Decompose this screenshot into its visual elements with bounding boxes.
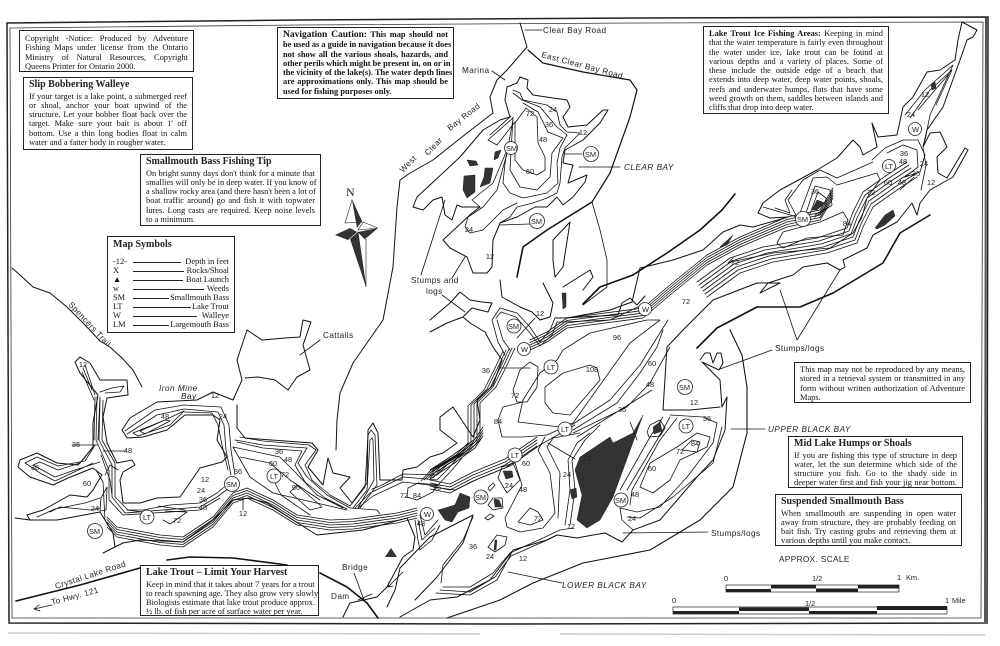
fish location markers: SM bbox=[797, 215, 808, 224]
depth labels: 24 bbox=[920, 159, 928, 168]
panel: map symbols legend: Boat Launch bbox=[186, 275, 229, 284]
islands: Clear Bay bbox=[463, 150, 501, 198]
panel: mid lake humps or shoals: structure you fish. Go to the shady side in bbox=[794, 469, 957, 478]
depth labels: 36 bbox=[469, 542, 477, 551]
panel: lake trout limit your harvest: Biologists estimate that lake trout produce approx. bbox=[146, 598, 315, 607]
panel: slip bobbering walleye: structure. Let your bobber float back over the bbox=[29, 110, 187, 119]
panel: map symbols legend: Smallmouth Bass bbox=[170, 293, 229, 302]
panel: lake trout ice fishing areas: these include the outside edge of a beach that bbox=[709, 66, 883, 75]
road and place labels: West bbox=[398, 153, 419, 174]
panel: smallmouth bass fishing tip: to a minimum. bbox=[146, 215, 195, 224]
copyright notice bbox=[19, 30, 194, 72]
fish location markers: LT bbox=[682, 422, 691, 431]
panel: map symbols legend bbox=[107, 236, 235, 333]
depth labels: 84 bbox=[494, 417, 502, 426]
depth labels: 36 bbox=[912, 169, 920, 178]
depth labels: 24 bbox=[628, 514, 636, 523]
contours: west basins bbox=[25, 365, 462, 550]
panel: mid lake humps or shoals bbox=[788, 436, 963, 488]
contours: main lake bundles bbox=[421, 65, 953, 595]
panel: lake trout ice fishing areas: Lake Trout Ice Fishing Areas: Keeping in mind bbox=[709, 29, 883, 38]
road and place labels: East Clear Bay Road bbox=[540, 50, 624, 81]
fish location markers: SM bbox=[226, 480, 237, 489]
fish location markers: LT bbox=[561, 425, 570, 434]
panel: smallmouth bass fishing tip: smallies will only be in deep water. If you know of bbox=[146, 178, 316, 187]
fish location markers: SM bbox=[89, 527, 100, 536]
depth labels: 72 bbox=[511, 391, 519, 400]
depth labels: 48 bbox=[199, 503, 207, 512]
panel: suspended smallmouth bass: When smallmouth are suspending in open water bbox=[781, 508, 956, 518]
panel: reproduction notice: stored in a retrieval system or transmitted in any bbox=[800, 374, 965, 383]
panel: lake trout ice fishing areas: various depths and a variety of places. Some of bbox=[709, 57, 883, 66]
depth labels: 36 bbox=[199, 495, 207, 504]
depth labels: 72 bbox=[731, 258, 739, 267]
depth labels: 12 bbox=[583, 454, 591, 463]
fish location markers: SM bbox=[679, 383, 690, 392]
depth labels: 12 bbox=[579, 128, 587, 137]
depth labels: 24 bbox=[907, 110, 915, 119]
road and place labels: logs bbox=[426, 287, 443, 296]
panel: smallmouth bass fishing tip: boat traffic around) go and fish it with topwater bbox=[146, 196, 315, 205]
depth labels: 48 bbox=[284, 455, 292, 464]
depth labels: 60 bbox=[648, 464, 656, 473]
panel: map symbols legend: Depth in feet bbox=[185, 257, 229, 266]
depth labels: 24 bbox=[505, 481, 513, 490]
scale bars: 1/2 bbox=[805, 599, 815, 608]
depth labels: 84 bbox=[691, 439, 699, 448]
depth labels: 36 bbox=[618, 405, 626, 414]
fish location markers: SM bbox=[475, 493, 486, 502]
road and place labels: Stumps and bbox=[411, 276, 459, 285]
panel: mid lake humps or shoals: water, let the sun determine which side of the bbox=[794, 460, 957, 469]
panel: navigation caution: the vicinity of the lake(s). The water depth lines bbox=[283, 68, 452, 77]
road and place labels: Dam bbox=[331, 592, 350, 601]
panel: map symbols legend: LM bbox=[113, 320, 126, 329]
road and place labels: Clear bbox=[423, 136, 444, 157]
panel: map symbols legend: Rocks/Shoal bbox=[187, 266, 229, 275]
panel: mid lake humps or shoals: deeper water first and fish your jig near bottom. bbox=[794, 478, 957, 487]
panel: navigation caution: be used as a guide in navigation because it does bbox=[283, 40, 451, 49]
depth labels: 12 bbox=[211, 391, 219, 400]
road and place labels: To Hwy. 121 bbox=[50, 586, 100, 607]
depth labels: 60 bbox=[648, 359, 656, 368]
road and place labels: CLEAR BAY bbox=[624, 163, 674, 172]
depth labels: 72 bbox=[534, 514, 542, 523]
panel: map symbols legend: Walleye bbox=[202, 311, 229, 320]
depth labels: 72 bbox=[173, 516, 181, 525]
road and place labels: Marina bbox=[462, 66, 489, 75]
depth labels: 60 bbox=[269, 459, 277, 468]
panel: map symbols legend: Largemouth Bass bbox=[170, 320, 229, 329]
depth labels: 72 bbox=[682, 297, 690, 306]
road and place labels: Bay Road bbox=[446, 101, 482, 133]
fish location markers: SM bbox=[585, 150, 596, 159]
depth labels: 36 bbox=[703, 414, 711, 423]
depth labels: 36 bbox=[900, 149, 908, 158]
panel: slip bobbering walleye bbox=[23, 77, 193, 150]
copyright notice: Queens Printer for Ontario 2000. bbox=[25, 62, 135, 71]
panel: reproduction notice bbox=[794, 362, 971, 403]
depth labels: 12 bbox=[690, 398, 698, 407]
panel: lake trout ice fishing areas: that the water temperature is fairly even throughout bbox=[709, 38, 883, 47]
scale bars bbox=[672, 573, 966, 614]
depth labels: 48 bbox=[898, 178, 906, 187]
fish location markers: SM bbox=[615, 496, 626, 505]
scale bars: 1 bbox=[897, 573, 901, 582]
panel: lake trout ice fishing areas: extends into deep water, deep water points, shoals, bbox=[709, 75, 883, 84]
panel: mid lake humps or shoals: Mid Lake Humps or Shoals bbox=[794, 438, 912, 449]
depth labels: 36 bbox=[811, 187, 819, 196]
depth labels: 24 bbox=[91, 504, 99, 513]
depth labels: 48 bbox=[519, 485, 527, 494]
depth labels: 48 bbox=[646, 380, 654, 389]
fish location markers: LT bbox=[143, 513, 152, 522]
panel: slip bobbering walleye: or shoal, anchor your boat upwind of the bbox=[29, 101, 187, 110]
panel: suspended smallmouth bass bbox=[775, 494, 962, 546]
panel: slip bobbering walleye: Slip Bobbering Walleye bbox=[29, 79, 129, 90]
depth labels: 48 bbox=[161, 412, 169, 421]
panel: navigation caution bbox=[277, 27, 454, 99]
panel: smallmouth bass fishing tip: lures. Long casts are required. Keep noise levels bbox=[146, 206, 315, 215]
panel: lake trout ice fishing areas: weed growth on them, saddles between islands and bbox=[709, 94, 883, 103]
fish location markers: SM bbox=[531, 217, 542, 226]
scale bars: Mile bbox=[952, 596, 966, 605]
depth labels: 48 bbox=[899, 157, 907, 166]
panel: navigation caution: other perils which might be present in, on or in bbox=[283, 59, 451, 68]
panel: suspended smallmouth bass: Suspended Smallmouth Bass bbox=[781, 496, 904, 507]
copyright notice: Copyright -Notice: Produced by Adventure bbox=[25, 34, 188, 43]
depth labels: 60 bbox=[83, 479, 91, 488]
depth labels: 12 bbox=[536, 309, 544, 318]
road and place labels: Bay bbox=[181, 392, 197, 401]
panel: suspended smallmouth bass: bait fish. Try casting grubs and retrieving them at bbox=[781, 527, 956, 536]
depth labels: 96 bbox=[292, 483, 300, 492]
panel: map symbols legend: w bbox=[113, 284, 119, 293]
depth labels: 24 bbox=[549, 105, 557, 114]
panel: navigation caution: are approximations only. This map should be bbox=[283, 77, 448, 86]
depth labels: 84 bbox=[843, 219, 851, 228]
depth labels: 24 bbox=[197, 486, 205, 495]
panel: lake trout ice fishing areas: cliffs that drop into deep water. bbox=[709, 103, 814, 112]
icon: boat launch bbox=[385, 548, 397, 557]
depth labels: 36 bbox=[234, 467, 242, 476]
panel: smallmouth bass fishing tip bbox=[140, 154, 321, 226]
depth labels: 12 bbox=[79, 360, 87, 369]
depth labels: 60 bbox=[884, 178, 892, 187]
panel: map symbols legend: Map Symbols bbox=[113, 239, 172, 250]
depth labels: 24 bbox=[219, 412, 227, 421]
leader lines bbox=[34, 30, 840, 611]
icon: compass rose bbox=[335, 185, 378, 287]
depth labels: 12 bbox=[519, 554, 527, 563]
copyright notice: Fishing Maps under license from the Ontario bbox=[25, 43, 188, 52]
depth labels: 12 bbox=[239, 509, 247, 518]
road and place labels: Iron Mine bbox=[159, 384, 198, 393]
panel: map symbols legend: ▲ bbox=[113, 275, 121, 284]
scale bars: Km. bbox=[906, 573, 919, 582]
fish location markers: LT bbox=[547, 363, 556, 372]
panel: navigation caution: not show all the various shoals, hazards, and bbox=[283, 50, 448, 59]
depth labels: 48 bbox=[124, 446, 132, 455]
road and place labels: Spencers Trail bbox=[67, 300, 113, 349]
lake outline: Clear Bay bbox=[413, 77, 608, 273]
depth labels: 72 bbox=[400, 491, 408, 500]
depth labels: 96 bbox=[433, 483, 441, 492]
panel: map symbols legend: Lake Trout bbox=[192, 302, 229, 311]
road and place labels: UPPER BLACK BAY bbox=[768, 425, 851, 434]
depth labels bbox=[31, 90, 935, 563]
fish location markers: SM bbox=[506, 144, 517, 153]
fish location markers bbox=[88, 122, 922, 538]
depth labels: 96 bbox=[613, 333, 621, 342]
contours: Clear Bay bbox=[465, 90, 580, 233]
fish location markers: W bbox=[912, 125, 919, 134]
road and place labels: Stumps/logs bbox=[775, 344, 824, 353]
panel: map symbols legend: LT bbox=[113, 302, 122, 311]
panel: lake trout ice fishing areas: reefs and underwater humps, flats that have some bbox=[709, 85, 883, 94]
fish location markers: SM bbox=[508, 322, 519, 331]
fish location markers: W bbox=[424, 510, 431, 519]
depth labels: 72 bbox=[526, 109, 534, 118]
panel: navigation caution: Navigation Caution: This map should not bbox=[283, 30, 448, 40]
panel: lake trout ice fishing areas bbox=[703, 26, 889, 114]
fish location markers: LT bbox=[511, 451, 520, 460]
icon: compass rose: N bbox=[346, 185, 355, 199]
scale bars: 0 bbox=[724, 574, 728, 583]
scale bars: 1 bbox=[945, 596, 949, 605]
depth labels: 72 bbox=[676, 447, 684, 456]
panel: smallmouth bass fishing tip: On bright sunny days don't think for a minute that bbox=[146, 168, 315, 178]
panel: slip bobbering walleye: bottom. Use a thin long bodies float in calm bbox=[29, 129, 187, 138]
lake outline: Upper and Lower Black Bay bbox=[387, 353, 727, 617]
lake outline: stump bay bbox=[430, 292, 502, 360]
depth labels: 108 bbox=[586, 365, 598, 374]
depth labels: 36 bbox=[275, 447, 283, 456]
road and place labels: Bridge bbox=[342, 563, 368, 572]
panel: mid lake humps or shoals: If you are fishing this type of structure in deep bbox=[794, 450, 957, 460]
panel: lake trout limit your harvest bbox=[140, 565, 319, 616]
panel: slip bobbering walleye: If your target is a lake point, a submerged reef bbox=[29, 92, 187, 100]
panel: lake trout limit your harvest: to reach spawning age. They also grow very slowly. bbox=[146, 589, 319, 598]
lake outline: west arms and Iron Mine Bay bbox=[15, 320, 502, 617]
lake outline: narrow north bay bbox=[500, 222, 645, 320]
road and place labels: Clear Bay Road bbox=[543, 26, 606, 35]
panel: slip bobbering walleye: water and a fatter body in rougher water. bbox=[29, 138, 165, 147]
depth labels: 48 bbox=[631, 490, 639, 499]
panel: reproduction notice: Maps. bbox=[800, 393, 821, 402]
panel: map symbols legend: SM bbox=[113, 293, 125, 302]
depth labels: 36 bbox=[31, 463, 39, 472]
scale bars: 0 bbox=[672, 596, 676, 605]
depth labels: 24 bbox=[486, 552, 494, 561]
depth labels: 48 bbox=[539, 135, 547, 144]
road and place labels: LOWER BLACK BAY bbox=[562, 581, 647, 590]
depth labels: 60 bbox=[526, 167, 534, 176]
panel: smallmouth bass fishing tip: a shallow rocky area (and there hasn't been a lot of bbox=[146, 187, 316, 196]
islands: main lake bbox=[438, 82, 936, 550]
panel: lake trout ice fishing areas: the water under ice, lake trout can be found at bbox=[709, 48, 883, 57]
depth labels: 84 bbox=[413, 491, 421, 500]
depth labels: 60 bbox=[522, 459, 530, 468]
copyright notice: Ministry of Natural Resources, Copyright bbox=[25, 53, 188, 62]
road and place labels: APPROX. SCALE bbox=[779, 555, 850, 564]
depth labels: 36 bbox=[72, 440, 80, 449]
depth labels: 12 bbox=[567, 522, 575, 531]
panel: smallmouth bass fishing tip: Smallmouth Bass Fishing Tip bbox=[146, 156, 272, 167]
depth labels: 12 bbox=[921, 90, 929, 99]
scale bars: 1/2 bbox=[812, 574, 822, 583]
lake outline: north-east arm and north shore of main basin bbox=[567, 22, 977, 410]
panel: reproduction notice: This map may not be reproduced by any means, bbox=[800, 365, 965, 374]
depth labels: 12 bbox=[486, 252, 494, 261]
road and place labels bbox=[50, 26, 851, 607]
panel: map symbols legend: Weeds bbox=[207, 284, 229, 293]
depth labels: 36 bbox=[482, 366, 490, 375]
depth labels: 72 bbox=[281, 470, 289, 479]
road and place labels: Stumps/logs bbox=[711, 529, 760, 538]
panel: slip bobbering walleye: target. Make sure your bait is about 1' off bbox=[29, 119, 187, 128]
panel: lake trout limit your harvest: Lake Trout – Limit Your Harvest bbox=[146, 567, 287, 578]
depth labels: 24 bbox=[563, 470, 571, 479]
panel: lake trout limit your harvest: Keep in mind that it takes about 7 years for a trout bbox=[146, 580, 315, 588]
fish location markers: W bbox=[642, 305, 649, 314]
depth labels: 36 bbox=[545, 120, 553, 129]
depth labels: 72 bbox=[867, 188, 875, 197]
panel: navigation caution: used for fishing purposes only. bbox=[283, 87, 392, 96]
road and place labels: Crystal Lake Road bbox=[54, 559, 127, 591]
fish location markers: W bbox=[521, 345, 528, 354]
road and place labels: Cattails bbox=[323, 331, 354, 340]
fish location markers: LT bbox=[270, 472, 279, 481]
depth labels: 12 bbox=[201, 475, 209, 484]
panel: map symbols legend: W bbox=[113, 311, 121, 320]
panel: suspended smallmouth bass: various depths until you make contact. bbox=[781, 536, 910, 545]
panel: map symbols legend: -12- bbox=[113, 257, 127, 266]
depth labels: 48 bbox=[417, 519, 425, 528]
fish location markers: LT bbox=[885, 162, 894, 171]
depth labels: 12 bbox=[927, 178, 935, 187]
panel: reproduction notice: form without written authorization of Adventure bbox=[800, 384, 965, 393]
panel: suspended smallmouth bass: away from structure, they are probably feeding on bbox=[781, 518, 956, 527]
depth labels: 24 bbox=[465, 225, 473, 234]
panel: map symbols legend: X bbox=[113, 266, 119, 275]
